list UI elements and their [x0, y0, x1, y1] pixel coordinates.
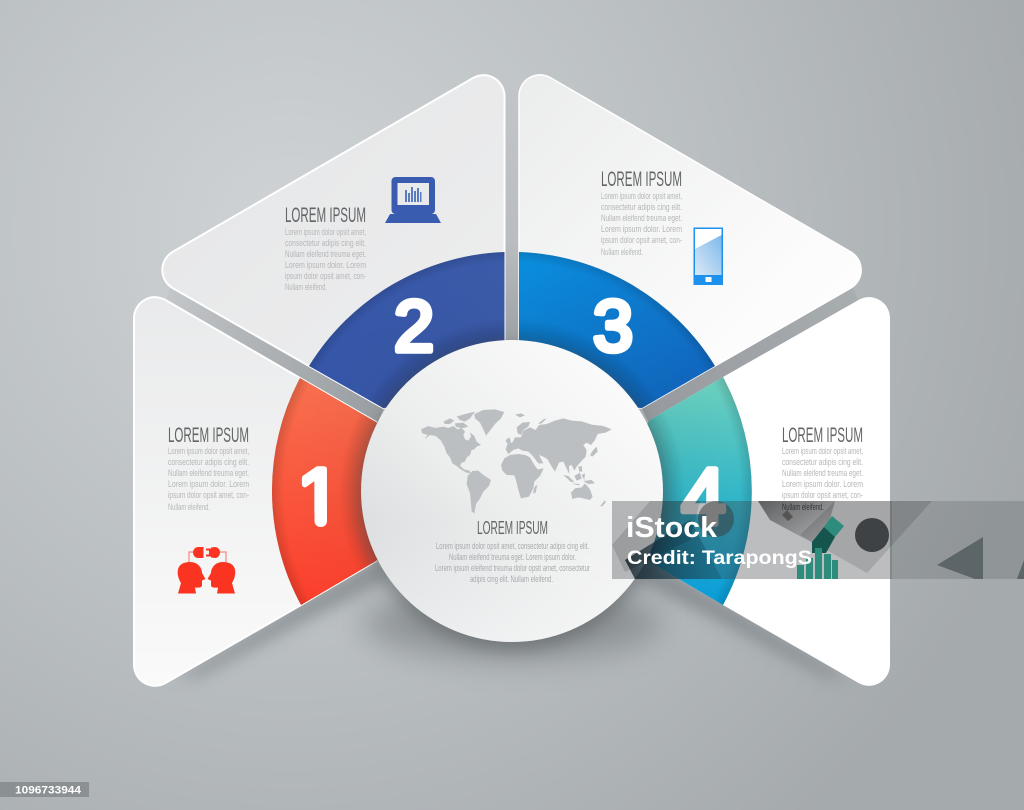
panel 2 body: Nullam eleifend. — [285, 282, 327, 293]
number 3: 3 — [593, 287, 633, 367]
panel 4 body: Lorem ipsum dolor. Lorem — [782, 479, 863, 490]
panel 1 — [134, 297, 376, 686]
panel shadows — [175, 557, 849, 680]
panel 1 body: ipsum dolor opsit amet, con- — [168, 490, 249, 501]
centre body: Lorem ipsum eleifend treuma dolor opsit amet, consectetur — [435, 563, 590, 574]
panel 3 body: Lorem ipsum dolor. Lorem — [601, 224, 682, 235]
panel 2 body: ipsum dolor opsit amet, con- — [285, 271, 366, 282]
watermark logo: iStock — [626, 512, 718, 544]
number 1: 1 — [297, 452, 342, 541]
panel 1 body: consectetur adipis cing elit. — [168, 457, 249, 468]
centre heading: LOREM IPSUM — [477, 518, 548, 538]
panel 4 body: consectetur adipis cing elit. — [782, 457, 863, 468]
number 1 — [302, 466, 327, 527]
centre body: Nullam eleifend treuma eget. Lorem ipsum dolor. — [449, 552, 576, 563]
watermark band — [612, 501, 1024, 579]
panel 2 — [162, 75, 504, 420]
panel 2 body: Lorem ipsum dolor. Lorem — [285, 260, 366, 271]
panel 4 body: ipsum dolor opsit amet, con- — [782, 490, 863, 501]
centre body: adipis cing elit. Nullam eleifend. — [470, 574, 553, 585]
panel 1 heading: LOREM IPSUM — [168, 424, 249, 447]
image id tag: 1096733944 — [15, 784, 82, 796]
watermark shapes — [612, 501, 1024, 579]
panel 3 body: Nullam eleifend treuma eget. — [601, 213, 682, 224]
panel 3 heading: LOREM IPSUM — [601, 168, 682, 191]
world map — [421, 409, 612, 513]
icon: smartphone — [694, 228, 723, 285]
centre body — [435, 541, 590, 585]
panel 4 body: Nullam eleifend treuma eget. — [782, 468, 863, 479]
watermark credit: Credit: TarapongS — [627, 548, 812, 569]
panel 3 body: consectetur adipis cing elit. — [601, 202, 682, 213]
panel 3 body: Nullam eleifend. — [601, 247, 643, 258]
centre body: Lorem ipsum dolor opsit amet, consectetur adipis cing elit. — [436, 541, 589, 552]
panel 4 body: Lorem ipsum dolor opsit amet, — [782, 446, 863, 457]
ring segment 4 — [600, 377, 752, 605]
icon: two heads with plug — [178, 547, 235, 594]
panel 3 — [519, 75, 861, 420]
panel 1 body: Lorem ipsum dolor. Lorem — [168, 479, 249, 490]
watermark green chart icon — [797, 516, 844, 579]
panel 1 body: Nullam eleifend. — [168, 502, 210, 513]
ring segment 2 — [309, 252, 504, 408]
ring segment 3 — [519, 252, 715, 408]
panel 2 body: consectetur adipis cing elit. — [285, 238, 366, 249]
panel 1 body: Nullam eleifend treuma eget. — [168, 468, 249, 479]
centre circle shadow — [359, 345, 665, 660]
panel 4 text — [782, 424, 863, 513]
panel 2 body — [285, 227, 366, 293]
image id tag — [0, 782, 89, 797]
panel 3 body: Lorem ipsum dolor opsit amet, — [601, 191, 682, 202]
panel 1 body — [168, 446, 249, 513]
number 2: 2 — [394, 287, 434, 367]
panel 4 body: Nullam eleifend. — [782, 502, 824, 513]
icon: desktop computer — [385, 177, 441, 223]
panel 2 body: Nullam eleifend treuma eget. — [285, 249, 366, 260]
centre circle — [361, 340, 663, 642]
panel 1 body: Lorem ipsum dolor opsit amet, — [168, 446, 249, 457]
panel 1 text — [168, 424, 249, 513]
panel 4 heading: LOREM IPSUM — [782, 424, 863, 447]
panel 4 — [650, 297, 890, 686]
panel 2 text — [285, 204, 366, 293]
number 4: 4 — [681, 452, 726, 541]
panel 2 body: Lorem ipsum dolor opsit amet, — [285, 227, 366, 238]
panel 4 body — [782, 446, 863, 513]
panel 3 text — [601, 168, 682, 258]
gaps between panels — [165, 80, 860, 428]
centre text block — [435, 518, 590, 585]
panel 3 body — [601, 191, 682, 258]
ring segment 1 — [272, 378, 440, 605]
panel 3 body: ipsum dolor opsit amet, con- — [601, 235, 682, 246]
panel 2 heading: LOREM IPSUM — [285, 204, 366, 227]
